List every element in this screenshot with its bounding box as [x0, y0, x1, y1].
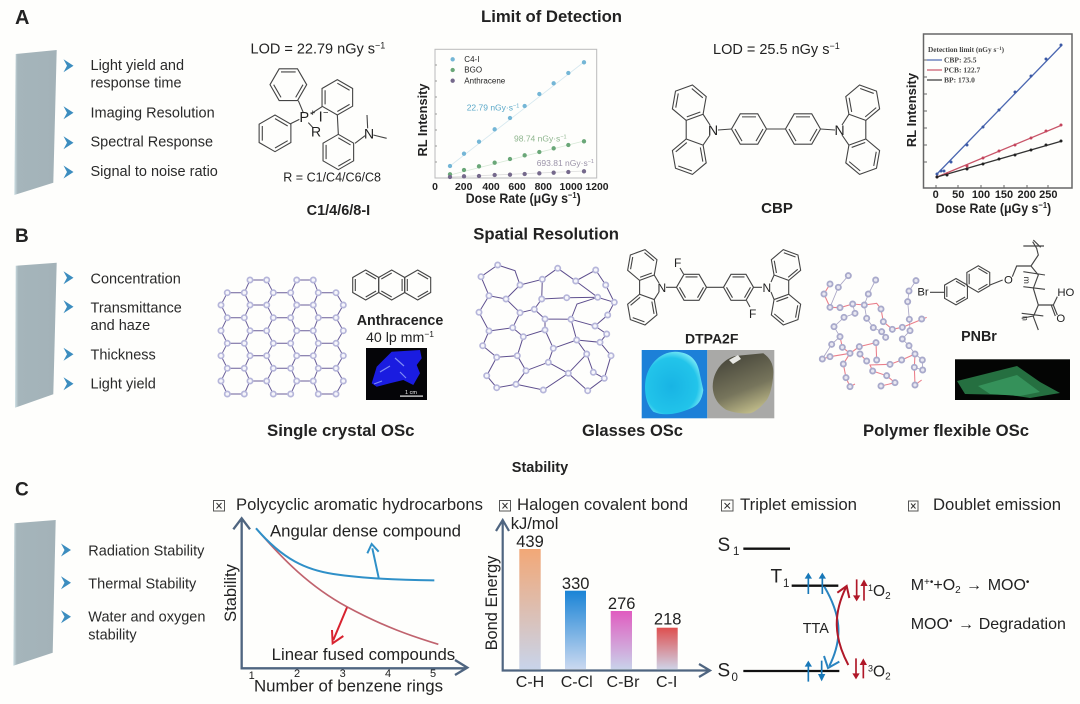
- bar chart: bond energy kJ/mol: 218: [654, 610, 681, 628]
- photo: DTPA2F glass under UV and daylight: [642, 350, 774, 418]
- list: stability factors: Water and oxygen: [88, 610, 205, 626]
- label: 40 lp/mm: 40 lp mm: [366, 330, 424, 346]
- molecule: DTPA2F: [622, 245, 807, 330]
- line chart: detection limit CBP, PCB, BP: ): [1047, 200, 1051, 216]
- bar chart: bond energy kJ/mol: C-I: [656, 674, 677, 691]
- molecule: DTPA2F: F: [749, 307, 756, 321]
- molecule: DTPA2F: N: [762, 281, 771, 295]
- list: stability factors: Thermal Stability: [88, 576, 197, 592]
- scatter chart: RL intensity vs dose rate (C4-I, BGO, Anthracene): Anthracene: [464, 76, 506, 85]
- slab A: [14, 50, 57, 195]
- molecule: C1/4/6/8-I: P: [299, 110, 309, 126]
- checkbox heading: Polycyclic aromatic hydrocarbons: Polycyclic aromatic hydrocarbons: [236, 496, 483, 514]
- list: scintillation factors: Imaging Resolution: [90, 106, 215, 122]
- list: stability factors: stability: [88, 627, 137, 643]
- energy diagram: triplet emission: 0: [732, 672, 738, 684]
- blue curve: [256, 528, 434, 580]
- caption: Glasses OSc: Glasses OSc: [582, 422, 683, 440]
- molecule: C1/4/6/8-I: R: [311, 124, 321, 140]
- scatter chart: RL intensity vs dose rate (C4-I, BGO, Anthracene): BGO: [464, 66, 482, 75]
- list: scintillation factors: Signal to noise ratio: [90, 164, 218, 180]
- scatter chart: RL intensity vs dose rate (C4-I, BGO, Anthracene): 800: [535, 182, 552, 193]
- list: resolution factors: Light yield: [90, 376, 156, 392]
- molecule: CBP: [665, 79, 887, 180]
- list: resolution factors: Thickness: [90, 347, 156, 363]
- heading: Limit of Detection: Limit of Detection: [481, 7, 622, 26]
- panel letter B: B: [15, 226, 29, 247]
- equations: doublet emission degradation: +O: [933, 577, 955, 594]
- line chart: stability vs number of benzene rings: 1: [249, 670, 255, 682]
- diagram: polymer chains: [822, 276, 927, 387]
- equations: doublet emission degradation: →: [958, 616, 974, 633]
- label: LOD 22.79: −1: [375, 40, 385, 50]
- line chart: stability vs number of benzene rings: 2: [294, 668, 300, 680]
- scatter chart: RL intensity vs dose rate (C4-I, BGO, Anthracene): C4-I: [464, 55, 479, 64]
- line chart: detection limit CBP, PCB, BP: Detection limit (nGy s: [928, 45, 996, 54]
- scatter chart: RL intensity vs dose rate (C4-I, BGO, Anthracene): 400: [482, 182, 500, 193]
- molecule: C1/4/6/8-I: I: [319, 109, 323, 125]
- list: stability factors: [61, 544, 205, 643]
- equations: doublet emission degradation: →: [966, 577, 982, 594]
- molecule: C1/4/6/8-I: [251, 69, 387, 174]
- label: LOD 25.5: LOD = 25.5 nGy s: [713, 42, 829, 58]
- list: scintillation factors: [64, 58, 218, 180]
- list: scintillation factors: Light yield and: [90, 58, 184, 74]
- scatter chart: RL intensity vs dose rate (C4-I, BGO, Anthracene): 22.79 nGy·s: [467, 103, 513, 113]
- equations: doublet emission degradation: •: [1026, 577, 1030, 588]
- line chart: detection limit CBP, PCB, BP: CBP: 25.5: [944, 56, 977, 64]
- bar chart: bond energy kJ/mol: 439: [516, 533, 544, 551]
- slab C: [13, 520, 56, 666]
- line chart: detection limit CBP, PCB, BP: 200: [1018, 189, 1036, 201]
- checkbox heading: Triplet emission: Triplet emission: [740, 496, 857, 514]
- list: scintillation factors: Spectral Response: [90, 135, 213, 151]
- scatter chart: RL intensity vs dose rate (C4-I, BGO, Anthracene): 1200: [585, 182, 609, 193]
- scatter chart: RL intensity vs dose rate (C4-I, BGO, Anthracene): 0: [432, 182, 438, 193]
- scatter chart: RL intensity vs dose rate (C4-I, BGO, Anthracene): 1000: [559, 182, 583, 193]
- energy diagram: triplet emission: 3: [868, 664, 873, 674]
- diagram: glass network: [479, 265, 614, 391]
- line chart: detection limit CBP, PCB, BP: [904, 34, 1072, 216]
- molecule: PNBr: O: [1004, 274, 1013, 286]
- scatter chart: RL intensity vs dose rate (C4-I, BGO, Anthracene): −1: [588, 159, 594, 165]
- slab B: [15, 263, 57, 408]
- scatter chart: RL intensity vs dose rate (C4-I, BGO, Anthracene): 200: [455, 182, 473, 193]
- name: Anthracence: Anthracence: [357, 313, 443, 329]
- line chart: detection limit CBP, PCB, BP: 50: [952, 189, 964, 201]
- energy diagram: triplet emission: O: [873, 664, 885, 681]
- scatter chart: RL intensity vs dose rate (C4-I, BGO, Anthracene): ): [577, 190, 581, 206]
- heading: Spatial Resolution: Spatial Resolution: [473, 224, 619, 243]
- list: stability factors: Radiation Stability: [88, 544, 205, 560]
- bar chart: bond energy kJ/mol: C-Br: [607, 674, 640, 691]
- name: CBP: CBP: [761, 200, 793, 217]
- line chart: stability vs number of benzene rings: Number of benzene rings: [254, 678, 443, 696]
- list: resolution factors: and haze: [90, 318, 150, 334]
- bar chart: bond energy kJ/mol: C-Cl: [561, 674, 593, 691]
- scatter chart: RL intensity vs dose rate (C4-I, BGO, Anthracene): −1: [513, 104, 519, 110]
- panel letter C: C: [15, 480, 29, 500]
- molecule: DTPA2F: F: [674, 256, 681, 270]
- name: DTPA2F: DTPA2F: [685, 330, 739, 346]
- equations: doublet emission degradation: 2: [955, 585, 961, 596]
- scatter chart: RL intensity vs dose rate (C4-I, BGO, Anthracene): [415, 49, 609, 206]
- line chart: detection limit CBP, PCB, BP: Dose Rate (μGy s: [936, 200, 1052, 216]
- diagram: single crystal lattice: [221, 280, 343, 394]
- checkbox heading: Doublet emission: Doublet emission: [933, 496, 1061, 514]
- line chart: detection limit CBP, PCB, BP: 0: [933, 189, 939, 201]
- line chart: stability vs number of benzene rings: 3: [340, 668, 346, 680]
- bar chart: bond energy kJ/mol: 330: [562, 575, 589, 593]
- panel C: stability: [13, 460, 1066, 696]
- list: scintillation factors: response time: [90, 76, 182, 92]
- energy diagram: triplet emission: S: [718, 535, 730, 556]
- line chart: stability vs number of benzene rings: Linear fused compounds: [272, 646, 455, 664]
- energy diagram: triplet emission: O: [873, 583, 885, 600]
- line chart: stability vs number of benzene rings: Stability: [222, 563, 240, 622]
- equations: doublet emission degradation: Degradation: [979, 616, 1066, 633]
- molecule: CBP: N: [708, 122, 718, 138]
- line chart: detection limit CBP, PCB, BP: RL Intensity: [904, 72, 919, 147]
- energy diagram: triplet emission: T: [770, 567, 782, 588]
- line chart: stability vs number of benzene rings: 5: [430, 668, 436, 680]
- molecule: PNBr: Br: [917, 287, 929, 299]
- line chart: detection limit CBP, PCB, BP: −1: [1038, 200, 1047, 210]
- photo: anthracene crystal: [366, 348, 427, 400]
- line chart: detection limit CBP, PCB, BP: BP: 173.0: [944, 76, 975, 84]
- equations: doublet emission degradation: [911, 577, 1066, 633]
- energy diagram: triplet emission: 1: [783, 578, 789, 590]
- name: PNBr: PNBr: [961, 329, 997, 345]
- list: resolution factors: [64, 271, 182, 392]
- list: resolution factors: Concentration: [90, 271, 181, 287]
- label: R substituents: R = C1/C4/C6/C8: [283, 171, 381, 185]
- molecule: C1/4/6/8-I: +: [310, 108, 315, 118]
- line chart: detection limit CBP, PCB, BP: PCB: 122.7: [944, 66, 980, 74]
- molecule: CBP: N: [834, 122, 845, 138]
- bar chart: bond energy kJ/mol: Bond Energy: [483, 555, 501, 650]
- line chart: detection limit CBP, PCB, BP: 150: [995, 189, 1013, 201]
- line chart: stability vs number of benzene rings: [222, 518, 467, 696]
- energy diagram: triplet emission: 2: [885, 672, 891, 683]
- label: 40 lp/mm: −1: [424, 329, 434, 339]
- scatter chart: RL intensity vs dose rate (C4-I, BGO, Anthracene): 600: [508, 182, 526, 193]
- molecule: C1/4/6/8-I: −: [323, 107, 328, 117]
- arrow: down to linear: [332, 607, 347, 643]
- line chart: detection limit CBP, PCB, BP: 100: [972, 189, 990, 201]
- heading: Stability: Stability: [512, 460, 568, 476]
- scatter chart: RL intensity vs dose rate (C4-I, BGO, Anthracene): 98.74 nGy·s: [514, 134, 560, 144]
- name: C1/4/6/8-I: C1/4/6/8-I: [307, 203, 370, 219]
- scatter chart: RL intensity vs dose rate (C4-I, BGO, Anthracene): −1: [568, 190, 577, 200]
- red curve: [256, 528, 438, 644]
- equations: doublet emission degradation: M: [911, 577, 924, 594]
- molecule: PNBr: HO: [1057, 287, 1075, 299]
- line chart: detection limit CBP, PCB, BP: −1: [996, 47, 1002, 52]
- molecule: C1/4/6/8-I: N: [364, 126, 374, 142]
- panel A: limit of detection: [14, 7, 1072, 219]
- energy diagram: triplet emission: S: [718, 661, 730, 682]
- scatter chart: RL intensity vs dose rate (C4-I, BGO, Anthracene): Dose Rate (μGy s: [466, 190, 582, 206]
- equations: doublet emission degradation: +•: [924, 577, 934, 588]
- energy diagram: triplet emission: 1: [733, 546, 739, 558]
- molecule: anthracene: [346, 266, 437, 304]
- equations: doublet emission degradation: •: [949, 616, 953, 627]
- list: resolution factors: Transmittance: [90, 300, 182, 316]
- equations: doublet emission degradation: MOO: [988, 577, 1026, 594]
- molecule: PNBr: n: [1021, 316, 1031, 321]
- bar chart: bond energy kJ/mol: kJ/mol: [511, 515, 558, 533]
- arrow: up to angular: [367, 544, 379, 578]
- label: LOD 22.79: LOD = 22.79 nGy s: [250, 42, 375, 58]
- energy diagram: triplet emission: [718, 535, 891, 684]
- molecule: DTPA2F: N: [658, 281, 666, 295]
- panel letter A: A: [15, 7, 29, 29]
- molecule: PNBr: m: [1022, 277, 1032, 284]
- line chart: detection limit CBP, PCB, BP: 250: [1039, 189, 1057, 201]
- bar chart: bond energy kJ/mol: 276: [608, 595, 635, 613]
- equations: doublet emission degradation: MOO: [911, 616, 949, 633]
- bar chart: bond energy kJ/mol: [483, 515, 710, 691]
- line chart: stability vs number of benzene rings: Angular dense compound: [270, 523, 461, 541]
- energy diagram: triplet emission: 1: [868, 583, 873, 593]
- photo: anthracene crystal: 1 cm: [405, 390, 417, 396]
- caption: Polymer flexible OSc: Polymer flexible OSc: [863, 421, 1029, 440]
- scatter chart: RL intensity vs dose rate (C4-I, BGO, Anthracene): 693.81 nGy·s: [537, 158, 588, 168]
- scatter chart: RL intensity vs dose rate (C4-I, BGO, Anthracene): −1: [560, 135, 567, 141]
- molecule: PNBr: O: [1056, 313, 1065, 325]
- molecule: PNBr: [917, 240, 1075, 330]
- panel B: spatial resolution: [15, 224, 1075, 440]
- caption: Single crystal OSc: Single crystal OSc: [267, 422, 414, 440]
- bar chart: bond energy kJ/mol: C-H: [516, 674, 544, 691]
- line chart: detection limit CBP, PCB, BP: ): [1002, 45, 1005, 54]
- line chart: stability vs number of benzene rings: 4: [385, 668, 391, 680]
- energy diagram: triplet emission: TTA: [803, 621, 829, 637]
- scatter chart: RL intensity vs dose rate (C4-I, BGO, Anthracene): RL Intensity: [415, 83, 430, 157]
- photo: flexible green film: [955, 359, 1070, 400]
- energy diagram: triplet emission: 2: [885, 591, 891, 602]
- label: LOD 25.5: −1: [829, 41, 840, 51]
- checkbox heading: Halogen covalent bond: Halogen covalent bond: [517, 496, 688, 514]
